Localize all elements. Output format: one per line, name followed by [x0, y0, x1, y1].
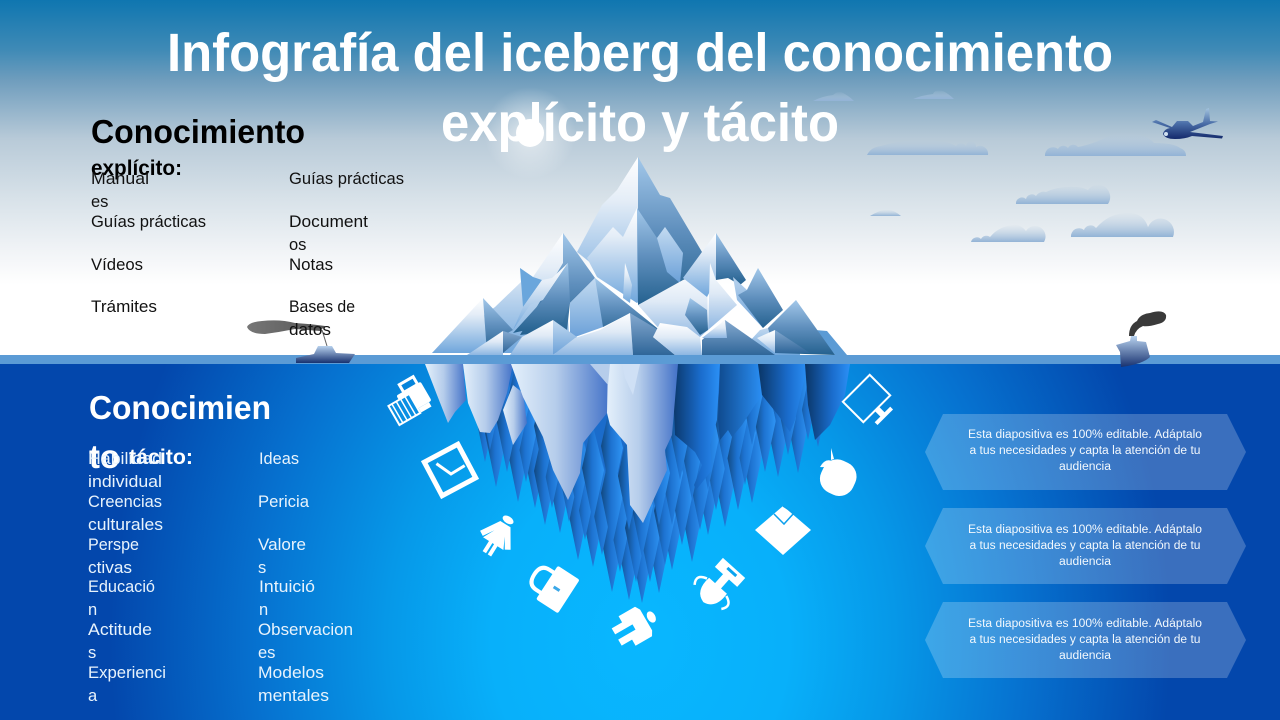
list: tacit items: Ideas — [259, 450, 299, 468]
panel: tacit knowledge — [88, 389, 353, 705]
icon: small boat with smoke — [247, 320, 355, 363]
list: tacit items: Actitude — [88, 621, 152, 639]
icon: man figure — [608, 600, 663, 652]
list: tacit items: Observacion — [258, 621, 353, 639]
list: tacit items: Modelos — [258, 664, 324, 682]
callout: note 2: audiencia — [1059, 556, 1112, 568]
title: explícito y tácito — [441, 93, 839, 153]
icon: steamship with smoke — [1116, 311, 1166, 367]
left mountain — [432, 233, 595, 353]
icon: padlock — [523, 558, 580, 613]
callout: note 1 — [925, 414, 1246, 490]
title: Infografía del iceberg del conocimiento — [167, 23, 1113, 83]
heading: explicit knowledge: explícito: — [91, 157, 182, 180]
list: tacit items: Pericia — [258, 493, 310, 511]
panel: explicit knowledge — [91, 113, 404, 339]
list: explicit items: Trámites — [91, 298, 157, 316]
iceberg above water — [432, 157, 847, 355]
icon: checkbox — [424, 444, 476, 496]
underwater shards — [478, 366, 820, 602]
heading: explicit knowledge: Conocimiento — [91, 113, 305, 150]
icon: apple — [815, 448, 861, 501]
callout: note 3 — [925, 602, 1246, 678]
icon: airplane — [1152, 108, 1223, 139]
callout: note 2: Esta diapositiva es 100% editable. Adáptalo — [968, 524, 1202, 536]
list: explicit items: Notas — [289, 256, 333, 274]
list: tacit items: a — [88, 687, 98, 705]
icon: printer — [382, 375, 434, 425]
list: tacit items: s — [88, 644, 96, 662]
callout: note 1: audiencia — [1059, 461, 1112, 473]
callout: note 2 — [925, 508, 1246, 584]
inner peak — [587, 208, 683, 305]
title — [167, 23, 1113, 153]
list: tacit items: culturales — [88, 516, 163, 534]
list: explicit items: Bases de — [289, 298, 355, 316]
list: tacit items: Creencias — [88, 493, 162, 511]
list: explicit items: Guías prácticas — [289, 170, 404, 188]
list: tacit items: n — [88, 601, 97, 619]
water background — [0, 364, 1280, 720]
list: tacit items: Valore — [258, 536, 306, 554]
list: tacit items: ctivas — [88, 559, 132, 577]
sky background — [0, 0, 1280, 356]
front ice blocks — [467, 313, 810, 355]
icon: trophy — [688, 554, 749, 616]
callout: note 1: Esta diapositiva es 100% editable. Adáptalo — [968, 429, 1202, 441]
horizon band — [0, 355, 1280, 364]
callout: note 1: a tus necesidades y capta la atención de tu — [970, 445, 1200, 457]
list: explicit items: os — [289, 236, 306, 254]
clouds — [813, 90, 1186, 242]
list: explicit items: Document — [289, 213, 368, 231]
callout: note 3: a tus necesidades y capta la atención de tu — [970, 634, 1200, 646]
list: tacit items: n — [259, 601, 268, 619]
list: tacit items: es — [258, 644, 275, 662]
main peak back faces — [577, 157, 702, 305]
list: explicit items: datos — [289, 321, 331, 339]
dark ice columns — [672, 364, 850, 490]
sun — [484, 87, 576, 179]
list: explicit items — [91, 170, 404, 339]
callout: note 3: Esta diapositiva es 100% editable. Adáptalo — [968, 618, 1202, 630]
list: tacit items: Intuició — [259, 578, 315, 596]
far right mountain — [737, 300, 847, 355]
icon: shirt box — [755, 506, 811, 555]
list: tacit items: Perspe — [88, 536, 139, 554]
list: explicit items: Guías prácticas — [91, 213, 206, 231]
list: explicit items: Vídeos — [91, 256, 143, 274]
list: tacit items — [88, 450, 353, 705]
callout: note 2: a tus necesidades y capta la atención de tu — [970, 540, 1200, 552]
heading: tacit knowledge: tácito: — [129, 446, 193, 469]
heading: tacit knowledge: to — [89, 438, 120, 475]
list: explicit items: es — [91, 193, 108, 211]
heading: tacit knowledge: Conocimien — [89, 389, 271, 426]
center lower mass — [570, 270, 708, 340]
heading: tacit knowledge — [89, 389, 271, 475]
icon: monitor — [843, 375, 897, 429]
right mountain — [683, 233, 783, 330]
list: tacit items: Habilidad — [88, 450, 162, 468]
icon: woman figure — [472, 507, 525, 563]
list: explicit items: Manual — [91, 170, 149, 188]
light ice columns — [425, 364, 678, 523]
heading: explicit knowledge — [91, 113, 305, 180]
list: tacit items: s — [258, 559, 266, 577]
list: tacit items: mentales — [258, 687, 329, 705]
list: tacit items: individual — [88, 473, 162, 491]
list: tacit items: Experienci — [88, 664, 166, 682]
list: tacit items: Educació — [88, 578, 155, 596]
callout: note 3: audiencia — [1059, 650, 1112, 662]
iceberg below water — [425, 364, 850, 602]
